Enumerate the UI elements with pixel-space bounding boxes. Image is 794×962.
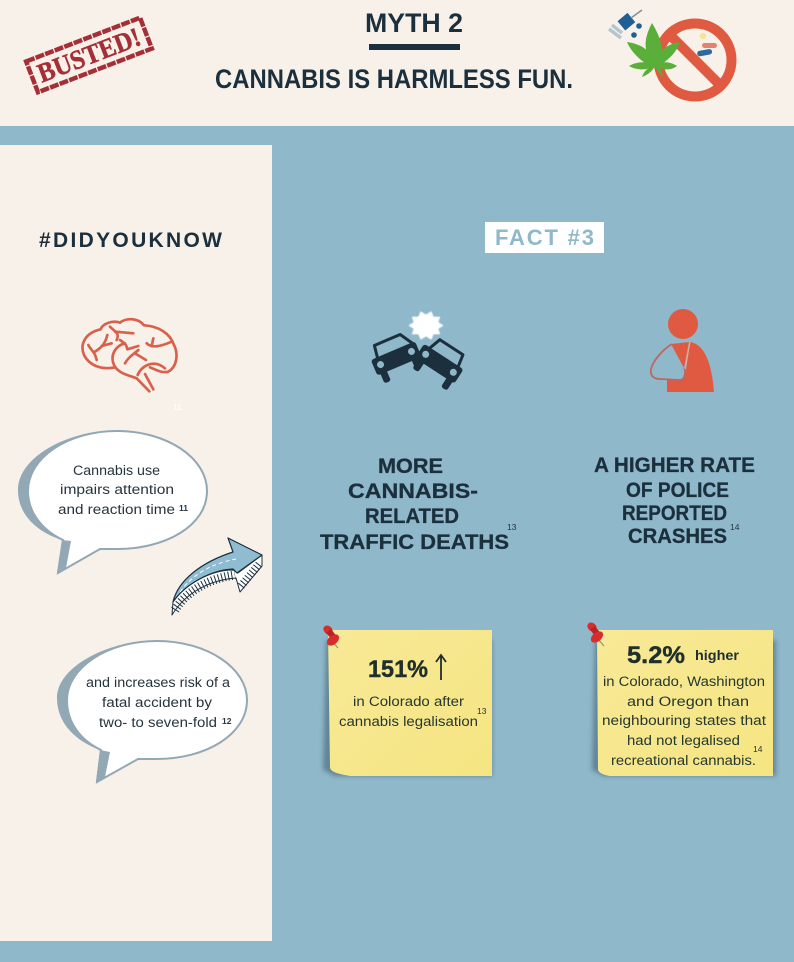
icon: person with sling: [651, 309, 714, 392]
text: bubble 2: 12: [222, 716, 232, 726]
text: note 1: [339, 694, 487, 729]
heading: traffic deaths: [320, 454, 517, 554]
text: bubble 1: and reaction time: [58, 502, 175, 517]
header band: [0, 0, 794, 126]
text: note 2: in Colorado, Washington: [603, 674, 765, 689]
icon: brain: [83, 319, 176, 391]
heading: did you know: #DIDYOUKNOW: [39, 229, 222, 252]
text: note 2: [602, 674, 766, 768]
text: bubble 1: Cannabis use: [73, 463, 160, 478]
text: bubble 2: and increases risk of a: [86, 675, 231, 690]
icon: pin: [322, 624, 341, 648]
text: note 2: 14: [753, 744, 763, 754]
text: bubble 1: 11: [179, 503, 188, 513]
speech bubble 1: [18, 431, 207, 573]
badge: fact 3: FACT #3: [495, 225, 594, 250]
heading: police crashes: 14: [730, 522, 740, 532]
subtitle: CANNABIS IS HARMLESS FUN.: [215, 64, 573, 94]
text: note 1: 13: [477, 706, 487, 716]
title: myth 2: MYTH 2: [365, 8, 463, 38]
heading: police crashes: [594, 453, 755, 548]
text: bubble 2: fatal accident by: [102, 695, 212, 710]
right car: [409, 334, 470, 392]
arrow up: [436, 655, 446, 680]
heading: police crashes: OF POLICE: [626, 478, 729, 502]
heading: traffic deaths: RELATED: [365, 504, 459, 528]
text: bubble 1: impairs attention: [60, 482, 174, 497]
stat: 5.2% higher: [627, 642, 740, 669]
heading: police crashes: CRASHES: [628, 524, 727, 548]
text: note 2: recreational cannabis.: [611, 753, 756, 768]
stat: 5.2% higher: higher: [695, 648, 740, 663]
heading: traffic deaths: 13: [507, 522, 517, 532]
icon: pin: [586, 621, 605, 646]
badge: fact 3: [485, 222, 604, 253]
speech bubble 2: [57, 641, 247, 782]
text: note 2: neighbouring states that: [602, 713, 766, 728]
text: note 2: and Oregon than: [627, 694, 749, 709]
sticky note 2: [586, 621, 776, 776]
heading: traffic deaths: MORE: [378, 454, 443, 478]
text: note 2: had not legalised: [627, 733, 740, 748]
stat: 151%: 151%: [368, 656, 428, 683]
icon: no drugs: [609, 10, 732, 96]
stat: 5.2% higher: 5.2%: [627, 642, 685, 669]
heading: traffic deaths: TRAFFIC DEATHS: [320, 530, 509, 554]
heading: traffic deaths: CANNABIS-: [348, 479, 478, 503]
text: bubble 1: [58, 463, 188, 517]
left car: [366, 330, 426, 385]
panel: did you know: [0, 145, 272, 941]
heading: police crashes: A HIGHER RATE: [594, 453, 755, 477]
faint footnote mark: 11: [173, 403, 182, 412]
icon: car crash: [366, 311, 470, 392]
text: note 1: in Colorado after: [353, 694, 465, 709]
text: bubble 2: [86, 675, 232, 730]
heading: police crashes: REPORTED: [622, 501, 727, 525]
text: note 1: cannabis legalisation: [339, 714, 478, 729]
busted stamp: BUSTED!: [33, 22, 145, 88]
arrow: [172, 538, 262, 615]
text: bubble 2: two- to seven-fold: [99, 715, 217, 730]
collision burst: [408, 311, 444, 340]
sticky note 1: [322, 624, 492, 776]
